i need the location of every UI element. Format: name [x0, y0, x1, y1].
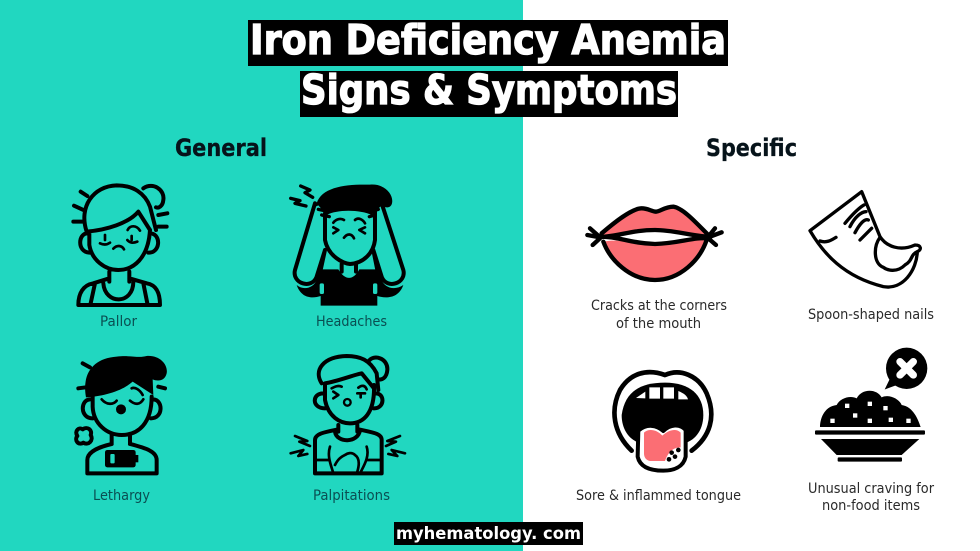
heading: Specific: Specific: [706, 134, 797, 162]
icon: person holding head: [291, 185, 404, 306]
panel: Pallor: [73, 185, 167, 330]
label: Unusual craving for non-food items: non-food items: [822, 498, 920, 514]
label: Unusual craving for non-food items: Unusual craving for: [808, 481, 934, 497]
panel: Lethargy: [76, 356, 167, 504]
icon: tired person with low battery: [76, 356, 167, 473]
title: Signs & Symptoms: [301, 66, 677, 114]
icon: spoon-shaped nail: [810, 192, 920, 287]
panel: Sore & inflamed tongue: [576, 372, 741, 504]
icon: open mouth with sore tongue: [614, 372, 711, 471]
icon: bowl of non-food with cross bubble: [815, 348, 927, 462]
label: Unusual craving for non-food items: [808, 481, 934, 514]
panel: Spoon-shaped nails: [808, 192, 934, 323]
label: Pallor: Pallor: [100, 314, 137, 330]
heading: General: General: [175, 134, 267, 162]
title: Iron Deficiency Anemia: [250, 16, 726, 64]
title: [248, 16, 728, 117]
icon: person with hand on chest: [291, 356, 405, 473]
icon: pale face: [73, 185, 167, 305]
panel: Headaches: [291, 185, 404, 330]
panel: Unusual craving for non-food items: [808, 348, 934, 514]
panel: Palpitations: [291, 356, 405, 504]
label: Lethargy: Lethargy: [93, 488, 150, 504]
label: Headaches: Headaches: [316, 314, 387, 330]
footer: source site: myhematology. com: [396, 524, 581, 544]
label: Cracks at the corners of the mouth: Cracks at the corners: [591, 298, 727, 314]
label: Sore & inflamed tongue: Sore & inflammed tongue: [576, 488, 741, 504]
label: Spoon-shaped nails: Spoon-shaped nails: [808, 307, 934, 323]
label: Cracks at the corners of the mouth: [591, 298, 727, 332]
icon: cracked lips: [587, 207, 722, 280]
label: Cracks at the corners of the mouth: of the mouth: [616, 316, 701, 332]
label: Palpitations: Palpitations: [313, 488, 390, 504]
teal left panel background: [0, 0, 523, 551]
panel: Cracks at the corners of the mouth: [587, 207, 727, 332]
